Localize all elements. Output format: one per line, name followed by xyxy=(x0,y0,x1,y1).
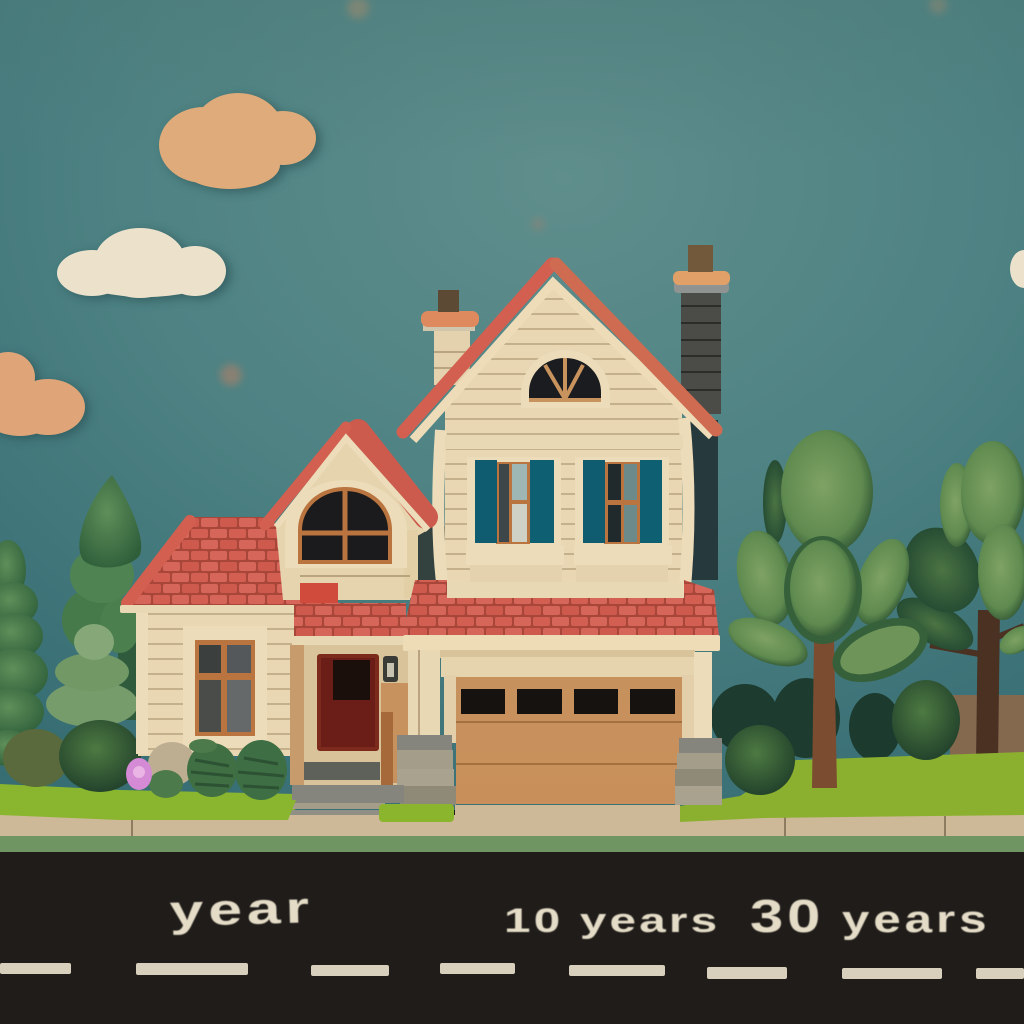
cloud: large orange xyxy=(159,93,321,192)
road centre dashes xyxy=(0,963,1024,979)
cloud: left orange xyxy=(0,352,89,439)
chimney: left xyxy=(421,290,479,385)
porch lamp and post xyxy=(381,656,408,785)
roof: middle section xyxy=(294,603,406,636)
roof: eave trim left xyxy=(120,605,298,613)
garage: columns and header xyxy=(408,650,712,743)
left lawn xyxy=(0,784,296,820)
label: 10 years: 10 years xyxy=(504,902,720,939)
stone base: left xyxy=(397,735,456,805)
house: porch recess xyxy=(290,645,408,785)
road xyxy=(0,852,1024,1024)
label: 30 years: 30 years xyxy=(750,891,991,942)
window: attic arch xyxy=(521,350,610,408)
tree: far right xyxy=(889,441,1024,762)
sidewalk xyxy=(0,805,1024,838)
dormer: wall xyxy=(276,438,428,600)
roof: left hip edge xyxy=(127,521,190,603)
window: dormer arch xyxy=(285,480,407,568)
bushes: dark background shrubs xyxy=(711,678,901,761)
garage door xyxy=(456,677,682,804)
tree: left cone pine xyxy=(62,475,141,720)
chimney: right xyxy=(673,245,730,580)
roof: dormer gable xyxy=(265,427,428,530)
bushes: moss balls right xyxy=(725,680,960,795)
bush: pale stacked topiary xyxy=(46,624,138,727)
window sills xyxy=(466,545,672,582)
roof: main gable edge xyxy=(403,264,716,440)
left lawn front edge xyxy=(0,800,296,820)
roof: lower main shingles xyxy=(402,580,719,636)
road curb xyxy=(0,836,1024,852)
road labels xyxy=(169,883,991,942)
window: upper right with shutters xyxy=(575,457,669,546)
window: upper left with shutters xyxy=(467,457,561,546)
cloud: white xyxy=(57,228,231,301)
bushes: moss balls left xyxy=(3,720,141,792)
roof: left hip shingles xyxy=(124,517,338,608)
eave trim: porch and garage xyxy=(292,635,720,651)
right lawn front edge xyxy=(680,797,1024,822)
small lawn patch xyxy=(379,804,454,822)
house: lower left wall xyxy=(136,610,298,756)
tree: left stacked pine xyxy=(0,540,48,766)
window: lower left xyxy=(183,626,267,748)
door: red front door xyxy=(317,654,379,751)
shadow gap between dormer and main wall xyxy=(414,526,448,588)
right lawn xyxy=(680,752,1024,822)
garden: shrubs, rock and pink flower xyxy=(126,739,287,800)
tree: right foreground xyxy=(722,430,937,788)
cloud: right edge xyxy=(1010,250,1024,288)
background: teal sky wall xyxy=(0,0,1024,810)
house: upper gable wall xyxy=(438,285,688,599)
label: year: year xyxy=(169,883,314,936)
porch steps xyxy=(290,762,404,821)
stone base: right xyxy=(675,738,722,805)
small red planter box xyxy=(300,583,338,607)
